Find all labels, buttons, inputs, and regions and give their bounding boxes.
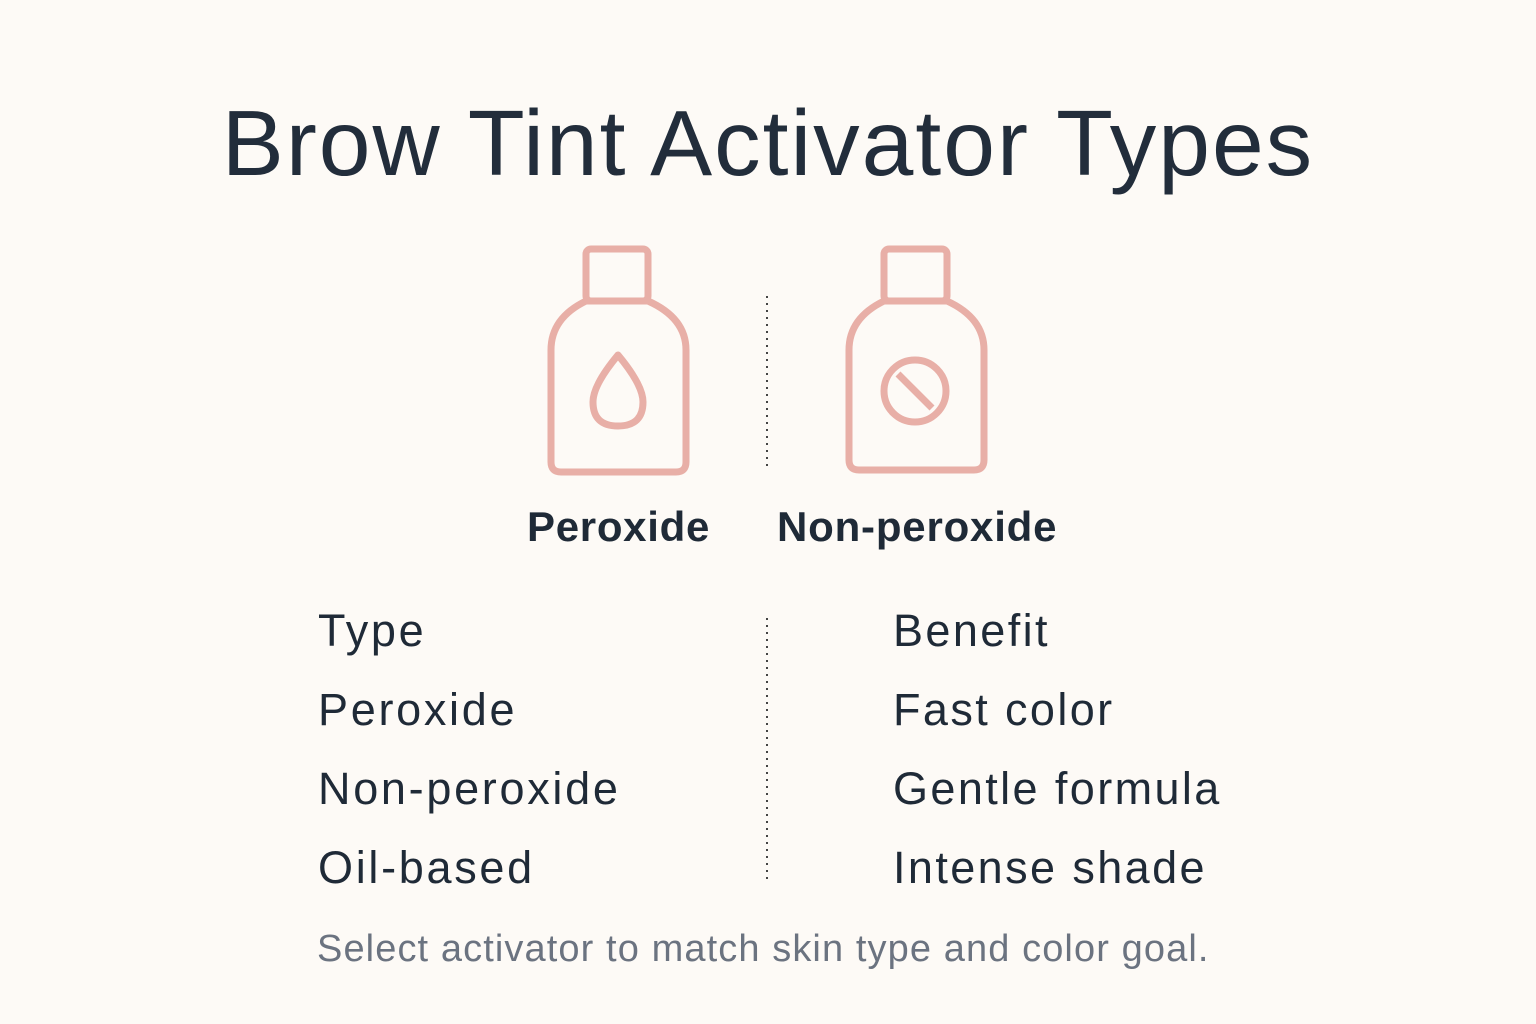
- table: type column: [318, 605, 621, 893]
- footer note: Select activator to match skin type and color goal.: [317, 928, 1210, 970]
- title: Brow Tint Activator Types: [222, 91, 1314, 195]
- label: peroxide: Peroxide: [527, 503, 710, 550]
- table: type column: Oil-based: [318, 842, 535, 893]
- icon: peroxide bottle: [551, 249, 686, 472]
- table: benefit column: Fast color: [893, 684, 1115, 735]
- table: benefit column: Benefit: [893, 605, 1050, 656]
- table: benefit column: [893, 605, 1222, 893]
- table: benefit column: Gentle formula: [893, 763, 1222, 814]
- table: type column: Peroxide: [318, 684, 517, 735]
- icon: non-peroxide bottle: [849, 249, 984, 470]
- divider top: [766, 296, 768, 468]
- divider table: [766, 618, 768, 882]
- table: type column: Non-peroxide: [318, 763, 621, 814]
- table: type column: Type: [318, 605, 426, 656]
- table: benefit column: Intense shade: [893, 842, 1207, 893]
- label: non-peroxide: Non-peroxide: [777, 503, 1057, 550]
